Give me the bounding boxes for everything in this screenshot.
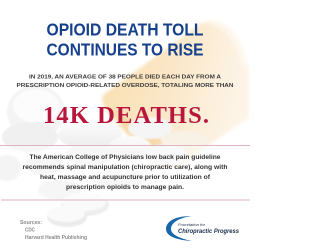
logo wordmark: Chiropractic Progress xyxy=(178,229,240,235)
bottle cap and pill pile xyxy=(0,85,209,227)
infographic canvas xyxy=(0,20,250,241)
background photo: pill bottle and pills xyxy=(0,18,250,227)
logo swoosh xyxy=(166,216,192,241)
guideline text: prescription opioids to manage pain. xyxy=(66,184,184,191)
title: OPIOID DEATH TOLL xyxy=(46,20,204,40)
pale band behind guideline text xyxy=(0,146,250,200)
sources xyxy=(20,220,87,241)
title: CONTINUES TO RISE xyxy=(46,40,204,60)
sources: Harvard Health Publishing xyxy=(25,235,87,241)
logo wordmark: Foundation for xyxy=(178,223,206,227)
title xyxy=(46,20,204,60)
sources: CDC xyxy=(25,228,35,234)
intro statistic text xyxy=(16,74,234,89)
sources: Sources: xyxy=(20,220,42,226)
guideline text: The American College of Physicians low back pain guideline xyxy=(30,154,221,161)
big number: 14K deaths: 14K DEATHS. xyxy=(43,102,209,129)
pill bottle xyxy=(102,18,249,168)
logo wordmark xyxy=(178,223,240,235)
intro statistic text: PRESCRIPTION OPIOID-RELATED OVERDOSE, TOTALING MORE THAN xyxy=(16,83,234,89)
guideline text: recommends spinal manipulation (chiropractic care), along with xyxy=(22,164,228,171)
top divider line xyxy=(0,145,250,146)
guideline text xyxy=(22,154,228,191)
guideline text: heat, massage and acupuncture prior to utilization of xyxy=(40,174,211,181)
logo: Foundation for Chiropractic Progress xyxy=(166,216,240,241)
intro statistic text: IN 2019, AN AVERAGE OF 38 PEOPLE DIED EACH DAY FROM A xyxy=(29,74,221,80)
bottom divider line xyxy=(1,200,250,201)
